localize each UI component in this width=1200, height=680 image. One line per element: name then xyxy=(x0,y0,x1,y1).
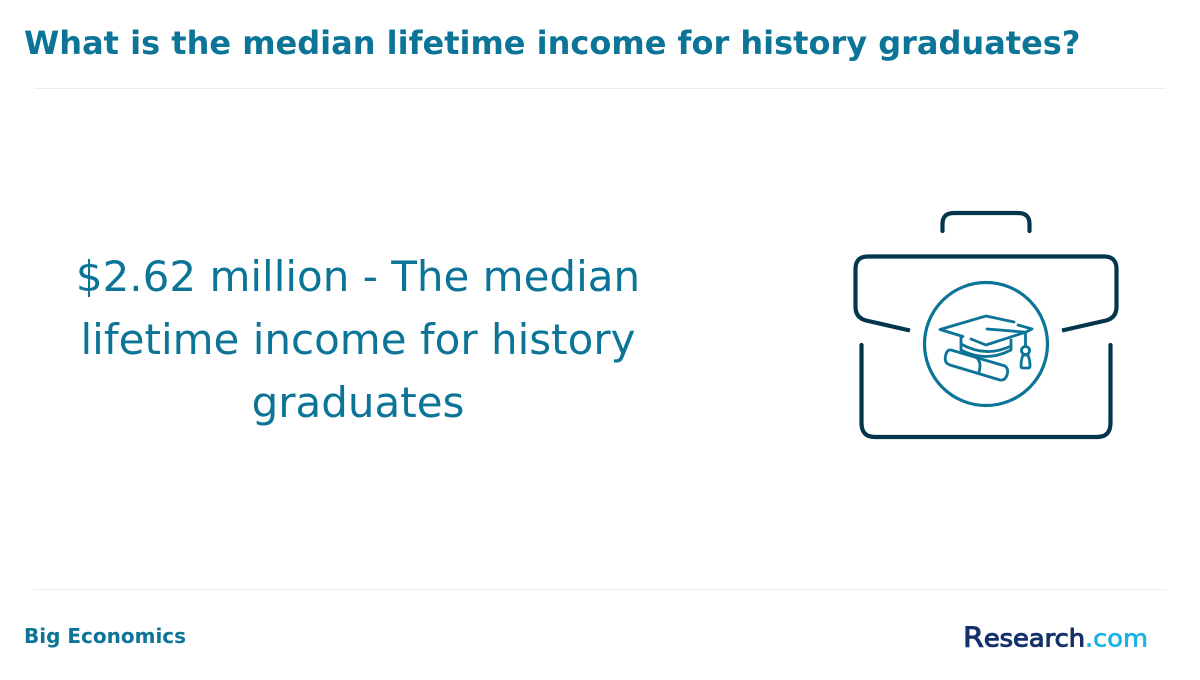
logo: Research.com xyxy=(963,620,1148,654)
teal circle badge xyxy=(924,282,1048,406)
main statement text: graduates xyxy=(252,378,464,427)
main statement text xyxy=(76,252,640,427)
graduation cap and diploma xyxy=(940,316,1032,380)
icon: briefcase with graduation cap and diploma xyxy=(853,210,1119,440)
footer label: Big Economics xyxy=(24,624,186,648)
main statement text: $2.62 million - The median xyxy=(76,252,640,301)
logo: Research.com: Research xyxy=(963,620,1085,654)
briefcase outline xyxy=(856,213,1116,437)
logo: Research.com: .com xyxy=(1085,624,1148,652)
title: What is the median lifetime income for history graduates? xyxy=(24,24,1080,62)
main statement text: lifetime income for history xyxy=(81,315,635,364)
